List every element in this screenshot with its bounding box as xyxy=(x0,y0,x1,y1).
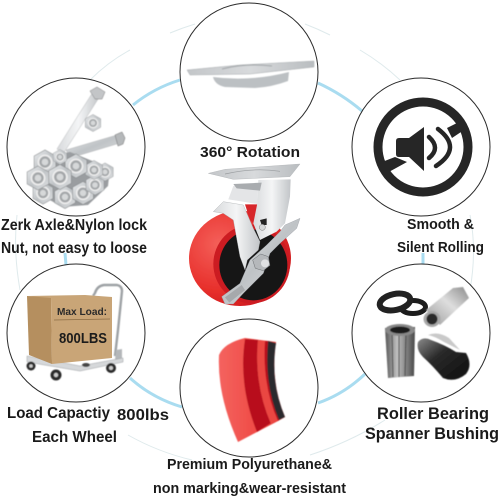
box weight: 800LBS xyxy=(59,331,107,347)
label: load capacity: Load Capactiy xyxy=(7,405,110,422)
circle: load capacity xyxy=(7,264,145,402)
circle: 360 rotation plate xyxy=(180,3,318,141)
icon: prohibition sign xyxy=(378,102,468,192)
connecting arcs: light blue inner ring xyxy=(65,80,423,407)
circle: bolts and nuts xyxy=(7,78,145,216)
icon: steel sleeve xyxy=(424,287,469,327)
label: smooth and silent: Smooth & xyxy=(407,216,474,233)
illustration: caster wheel xyxy=(189,164,300,306)
box label: Max Load: xyxy=(57,306,107,318)
icon: nut pile xyxy=(27,150,113,208)
label: load capacity: 800lbs xyxy=(117,407,169,424)
label: polyurethane: Premium Polyurethane& xyxy=(167,457,333,473)
wheel tyre xyxy=(189,211,291,306)
icon: needle roller bearing xyxy=(385,324,415,378)
circle: polyurethane tread xyxy=(180,319,318,457)
label: smooth and silent xyxy=(397,216,484,256)
icon: bolts xyxy=(57,87,125,158)
icon: cardboard box xyxy=(27,295,112,364)
red top of wheel behind fork xyxy=(245,204,257,225)
wheel hub xyxy=(219,230,287,300)
axle nut xyxy=(253,254,270,271)
icon: black washers xyxy=(378,291,426,314)
wheel inner red rim xyxy=(213,225,290,303)
label: load capacity xyxy=(7,405,169,446)
fork xyxy=(253,179,291,240)
label: smooth and silent: Silent Rolling xyxy=(397,239,484,256)
brake lever xyxy=(222,218,300,304)
label: zerk axle: Nut, not easy to loose xyxy=(1,240,147,257)
label: roller bearing: Roller Bearing xyxy=(377,404,489,423)
connecting arcs: pale grey outer ring xyxy=(16,24,474,460)
circle: silent icon xyxy=(352,78,490,216)
label: polyurethane: non marking&wear-resistant xyxy=(153,481,346,497)
label: zerk axle xyxy=(1,217,147,257)
icon: platform cart xyxy=(26,285,123,380)
label: polyurethane xyxy=(153,457,346,497)
icon: swivel plate xyxy=(187,61,314,88)
brake bracket xyxy=(213,202,260,270)
icon: speaker xyxy=(396,127,450,171)
icon: spanner bushing xyxy=(418,334,470,380)
label: zerk axle: Zerk Axle&Nylon lock xyxy=(1,217,147,234)
label: roller bearing xyxy=(365,404,499,443)
top plate xyxy=(208,164,300,179)
label: load capacity: Each Wheel xyxy=(32,429,117,446)
icon: wheel section xyxy=(219,338,285,442)
heading: 360 rotation: 360° Rotation xyxy=(200,144,300,161)
circle: roller bearing parts xyxy=(352,264,490,402)
